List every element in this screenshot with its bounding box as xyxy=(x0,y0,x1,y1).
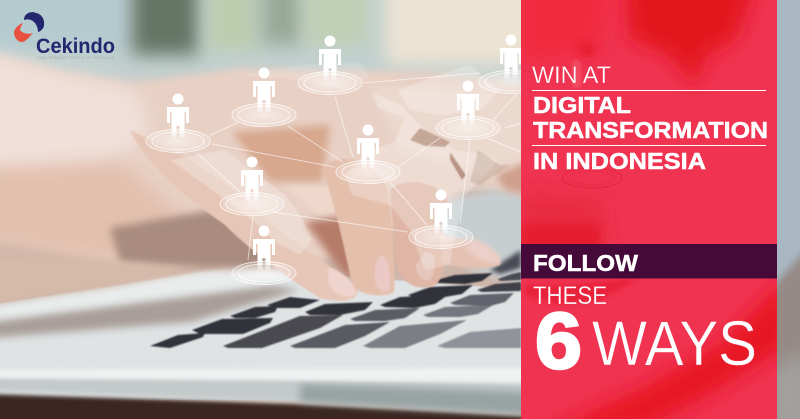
text: follow: FOLLOW xyxy=(533,250,638,276)
ring finger xyxy=(390,182,448,288)
heading: win at digital transformation in indonesia: TRANSFORMATION xyxy=(533,117,768,143)
heading: win at digital transformation in indonesia: DIGITAL xyxy=(533,92,631,118)
hand xyxy=(0,50,530,305)
logo icon xyxy=(14,12,44,42)
laptop body xyxy=(0,180,540,419)
text: these: THESE xyxy=(533,282,607,310)
person node: lower right xyxy=(409,190,473,248)
keyboard keys xyxy=(150,250,521,348)
person node: bottom left xyxy=(232,226,296,284)
purple banner xyxy=(521,244,777,278)
person node: top right xyxy=(479,34,543,94)
heading: win at digital transformation in indonesia xyxy=(532,62,768,174)
world map overlay xyxy=(170,62,510,270)
text: 6 ways xyxy=(535,296,757,385)
little finger xyxy=(440,235,500,269)
heading: win at digital transformation in indonesia: IN INDONESIA xyxy=(533,148,706,174)
person node: top centre xyxy=(298,36,362,94)
text: 6 ways: WAYS xyxy=(592,309,757,379)
heading: win at digital transformation in indonesia: WIN AT xyxy=(532,62,611,89)
person node: centre xyxy=(336,124,400,184)
person node: far left xyxy=(146,94,210,152)
red panel xyxy=(521,0,790,419)
text: 6 ways: 6 xyxy=(535,296,582,385)
person node: lower left xyxy=(220,156,284,216)
network connection lines xyxy=(197,73,521,260)
middle finger xyxy=(322,159,395,295)
logo: cekindo xyxy=(14,12,115,60)
person node: right xyxy=(436,80,500,140)
fingernails xyxy=(328,268,356,297)
logo tagline: Your Reliable Partner in Indonesia xyxy=(37,55,114,60)
right margin strip xyxy=(770,0,800,419)
blurred office backdrop xyxy=(0,0,560,85)
logo wordmark: Cekindo xyxy=(36,35,115,58)
index finger xyxy=(130,130,358,301)
person node: upper left xyxy=(232,68,296,126)
